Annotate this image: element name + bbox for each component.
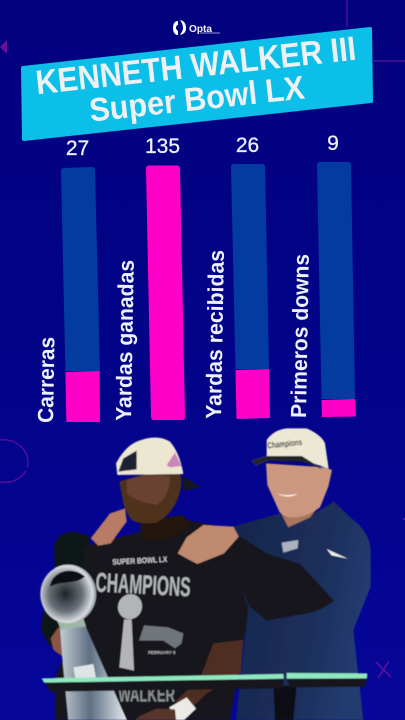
player: face xyxy=(119,473,181,523)
shirt: Seahawks logo xyxy=(139,625,183,648)
shirt: Lombardi graphic xyxy=(114,590,146,671)
bar: Yardas ganadas xyxy=(111,135,185,421)
shirt: Super Bowl LX line: SUPER BOWL LX xyxy=(112,555,168,567)
bar: Carreras: 27 xyxy=(66,137,89,160)
player: black champions shirt xyxy=(55,521,250,720)
player: cap xyxy=(116,437,201,491)
bar: Yardas ganadas: 135 xyxy=(145,135,180,158)
bar chart xyxy=(33,132,356,423)
coach: face xyxy=(266,463,332,517)
trophy xyxy=(40,565,127,720)
bar: Yardas recibidas xyxy=(201,134,270,419)
bar: Carreras xyxy=(33,137,100,423)
bar: Primeros downs xyxy=(286,132,356,418)
player: back arm xyxy=(41,532,89,647)
shirt: date text: FEBRUARY 8 xyxy=(148,650,176,655)
bar: Yardas recibidas: 26 xyxy=(236,134,259,157)
coach: dark sleeve xyxy=(225,537,334,621)
player: lower hand xyxy=(135,709,176,720)
coach: cap xyxy=(252,428,329,469)
bar: Carreras: Carreras xyxy=(33,337,60,423)
podium: stand post xyxy=(273,685,297,720)
bar: Primeros downs: 9 xyxy=(327,132,339,155)
bar: Primeros downs: Primeros downs xyxy=(286,254,314,418)
shirt: lower lettering: WALKER xyxy=(118,684,175,707)
photo: player and coach with trophy xyxy=(40,428,371,720)
coach: neck xyxy=(279,505,320,527)
coach: far hand xyxy=(91,508,127,546)
coach: smile xyxy=(277,493,298,497)
cap lettering: Champions xyxy=(267,437,303,450)
player: wristband xyxy=(169,697,196,720)
player: forearm xyxy=(175,640,243,707)
Opta logo xyxy=(173,20,220,35)
podium: green glass edge xyxy=(42,673,367,683)
coach: jacket xyxy=(225,502,371,720)
coach: Seahawks chest logo xyxy=(282,540,298,553)
shirt: CHAMPIONS lettering: CHAMPIONS xyxy=(95,567,191,602)
player: hand holding trophy xyxy=(51,627,72,657)
Opta logo: Opta xyxy=(189,23,212,35)
title banner xyxy=(21,27,373,141)
podium: underside of glass xyxy=(45,678,367,692)
player: neck xyxy=(140,515,190,540)
player: face highlight xyxy=(127,476,170,505)
subtitle: event: Super Bowl LX xyxy=(87,69,306,129)
title: player name: KENNETH WALKER III xyxy=(34,30,358,102)
bar: Yardas recibidas: Yardas recibidas xyxy=(201,250,229,419)
bar: Yardas ganadas: Yardas ganadas xyxy=(111,260,139,421)
coach: hand on shoulder xyxy=(178,525,239,564)
coach: Nike swoosh xyxy=(327,549,348,559)
